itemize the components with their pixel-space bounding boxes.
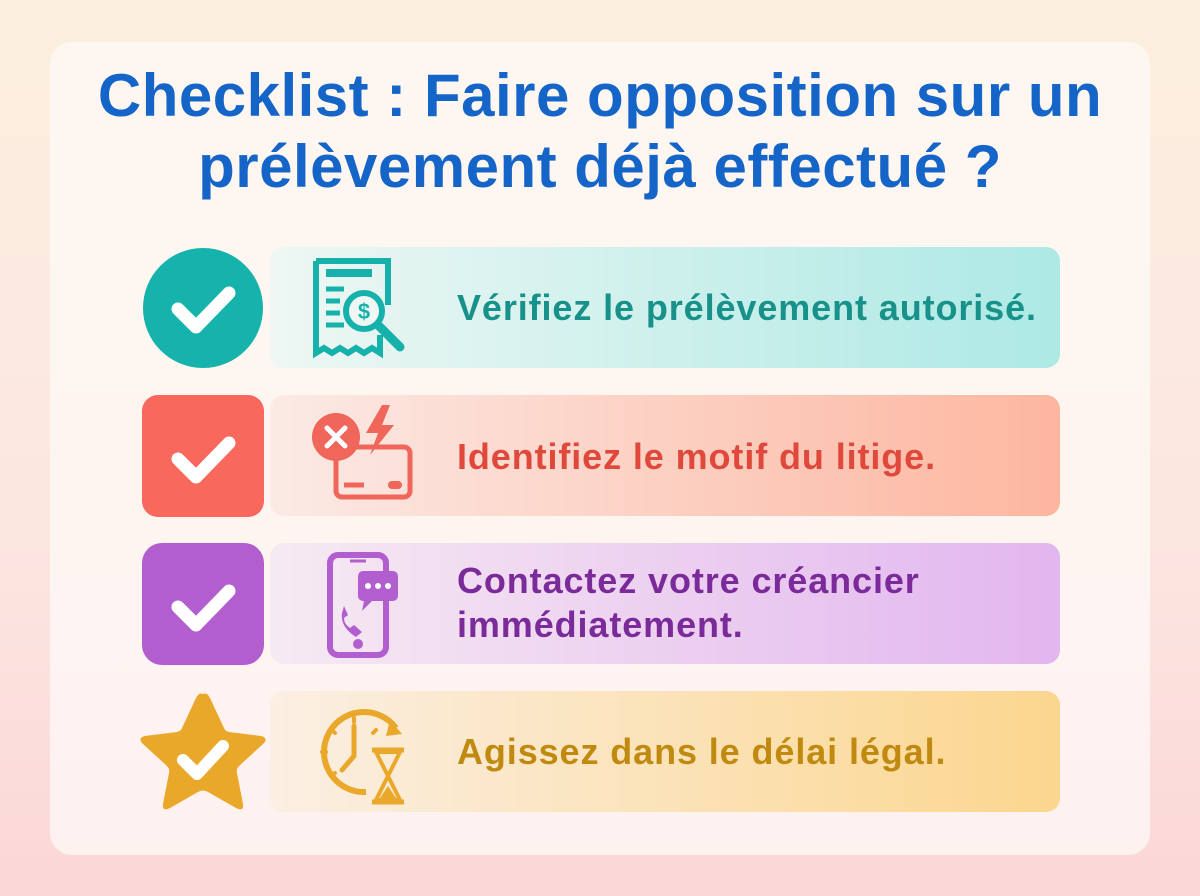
text 4: Agissez dans le délai légal. (457, 731, 946, 772)
title: prélèvement déjà effectué ? (198, 133, 1002, 200)
icon: receipt search (313, 258, 404, 358)
text 3: Contactez votre créancier (457, 560, 920, 601)
badge: purple square check (142, 543, 264, 665)
bar 1 (270, 247, 1060, 368)
icon: card error (312, 405, 412, 500)
row 4 (140, 691, 1060, 812)
text 2: Identifiez le motif du litige. (457, 436, 936, 477)
icon: receipt search: $ (358, 299, 370, 324)
bar 3 (270, 543, 1060, 664)
row 1 (143, 247, 1060, 368)
badge: star check (140, 694, 266, 810)
text 3: immédiatement. (457, 604, 744, 645)
title (98, 62, 1102, 200)
row 2 (142, 395, 1060, 517)
icon: phone chat (327, 552, 398, 658)
title: Checklist : Faire opposition sur un (98, 62, 1102, 129)
bar 4 (270, 691, 1060, 812)
text 3 (457, 560, 920, 645)
badge: square check (142, 395, 264, 517)
bar 2 (270, 395, 1060, 516)
icon: clock hourglass (320, 709, 404, 804)
row 3 (142, 543, 1060, 665)
text 1: Vérifiez le prélèvement autorisé. (457, 287, 1037, 328)
badge: circle check (143, 248, 263, 368)
